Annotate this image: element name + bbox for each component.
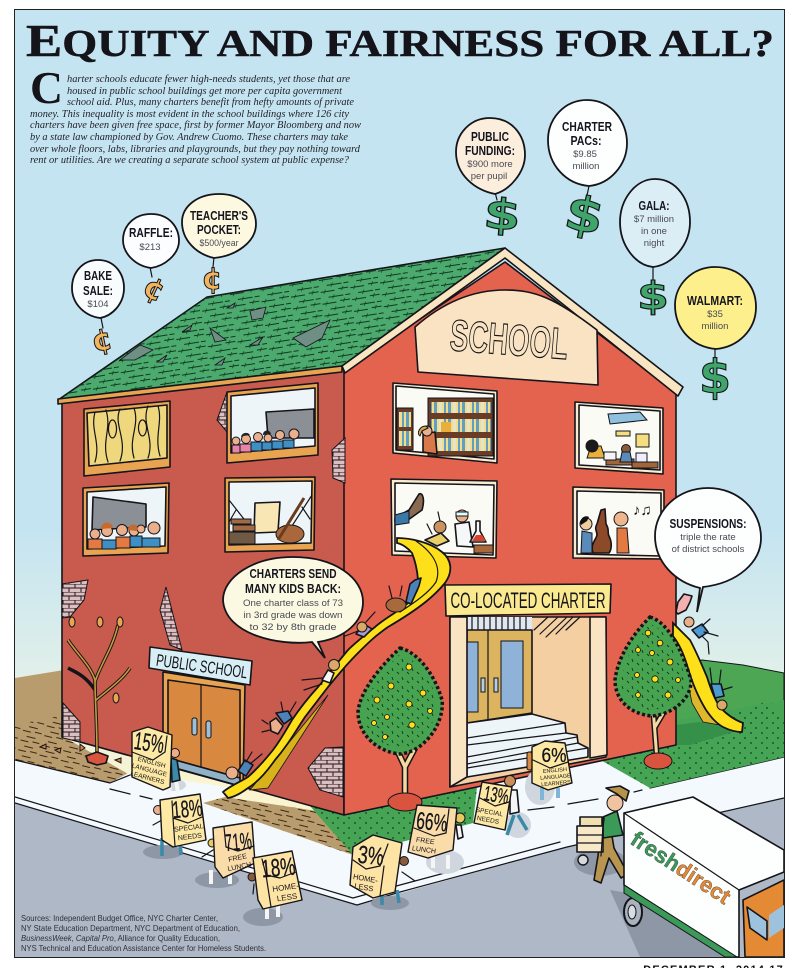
icon: dollar: $ (699, 350, 731, 404)
sidewalk dashes (110, 789, 642, 810)
card walker: 66% free lunch (408, 805, 465, 874)
window: science lab with slide opening (391, 479, 497, 558)
balloon: gala: in one (641, 226, 667, 237)
sources: NYS Technical and Education Assistance Center for Homeless Students. (21, 943, 266, 953)
double doors (467, 630, 532, 723)
balloon: charter PACs: $9.85 (573, 149, 597, 160)
music notes: ♪♫ (633, 502, 652, 519)
balloon: raffle (123, 214, 179, 310)
intro paragraph: money. This inequality is most evident in the school buildings where 126 city (30, 108, 349, 120)
speech bubble: charters send many kids back (223, 557, 363, 658)
sidewalk (15, 757, 784, 905)
green stripe (624, 885, 737, 957)
speech bubble: suspensions (655, 488, 761, 612)
curb line (15, 757, 784, 905)
intro paragraph: rent or utilities. Are we creating a separate school system at public expense? (30, 154, 349, 166)
speech bubble: charters send many kids back: One charter class of 73 (243, 598, 343, 609)
card walker: 15% English language learners (129, 727, 186, 795)
cab (743, 880, 784, 957)
card walker: 71% free lunch: FREE (228, 853, 248, 864)
steps (467, 714, 588, 777)
intro paragraph: harter schools educate fewer high-needs students, yet those that are (67, 73, 350, 85)
window: computer office (575, 402, 663, 474)
balloon: public funding (456, 118, 525, 241)
entrance ceiling hatching (467, 617, 580, 637)
card walker: 15% English language learners: ENGLISH (137, 756, 166, 770)
right tree (615, 617, 691, 769)
drop cap: C (30, 63, 63, 113)
entrance: co-located charter (445, 584, 611, 787)
window: upper classroom, crowded (227, 383, 318, 463)
public school sign: PUBLIC SCHOOL (155, 651, 249, 682)
icon: dollar: $ (637, 274, 669, 318)
front lawn and dirt patch (203, 787, 477, 855)
intro paragraph (30, 63, 362, 166)
card walker: 66% free lunch: FREE (415, 837, 435, 846)
brick patches (62, 392, 345, 797)
intro paragraph: housed in public school buildings get more per capita government (67, 85, 343, 97)
balloon: raffle: RAFFLE: (129, 226, 173, 240)
truck shadow (610, 890, 740, 957)
charter sign (445, 584, 611, 616)
speech bubble: suspensions: of district schools (672, 544, 745, 555)
card walker: 66% free lunch: LUNCH (412, 845, 436, 856)
balloon: walmart: million (702, 321, 728, 332)
card walker: 18% special needs: 18% (171, 795, 203, 824)
balloon: walmart: $35 (707, 309, 723, 320)
speech bubble: charters send many kids back: in 3rd grade was down (244, 610, 342, 621)
card walker: 71% free lunch: 71% (224, 828, 253, 857)
card walker: 3% homeless: HOME- (352, 872, 379, 885)
right yellow slide (673, 623, 743, 732)
intro paragraph: school aid. Plus, many charters benefit from hefty amounts of private (67, 96, 354, 108)
center tree (358, 648, 442, 811)
card walker: 18% homeless: 18% (260, 853, 296, 883)
balloon: gala: $7 million (634, 214, 674, 225)
entrance recess (450, 617, 606, 787)
title: EQUITY AND FAIRNESS FOR ALL? (26, 15, 774, 66)
card walker: 71% free lunch (195, 822, 255, 888)
speech bubble: suspensions: triple the rate (680, 532, 736, 543)
sources: BusinessWeek, Capital Pro, Alliance for Quality Education, (21, 933, 220, 943)
icon: cent: ¢ (202, 262, 222, 297)
school sign (415, 290, 598, 385)
card walker: 3% homeless: 3% (356, 841, 385, 871)
window: lower classroom, crowded (83, 483, 169, 556)
sources (21, 913, 266, 953)
window: storage room (225, 477, 315, 552)
speech bubble: charters send many kids back: MANY KIDS BACK: (245, 582, 341, 596)
balloon: public funding: $900 more (467, 159, 513, 170)
intro paragraph: charters have been given free space, first by former Mayor Bloomberg and now (30, 119, 362, 131)
icon: cent: ¢ (88, 321, 116, 360)
window: library (393, 383, 497, 463)
card walker: 18% special needs: SPECIAL (174, 823, 204, 834)
delivery truck (610, 797, 784, 957)
balloon: gala: GALA: (638, 198, 670, 213)
card walker: 3% homeless (350, 835, 415, 910)
window: boarded-up plywood (84, 401, 170, 476)
card walker: 15% English language learners: 15% (132, 727, 166, 759)
icon: cent: ¢ (137, 269, 171, 310)
public school door (163, 672, 245, 787)
balloon: gala (620, 179, 690, 318)
freshdirect logo: freshdirect (626, 826, 736, 909)
balloon: teacher's pocket: TEACHER'S (190, 208, 248, 223)
balloon: raffle: $213 (139, 242, 161, 253)
balloon: charter PACs: PACs: (570, 133, 602, 148)
balloon: public funding: per pupil (471, 171, 507, 182)
school sign lettering: SCHOOL (448, 311, 570, 369)
balloon: public funding: FUNDING: (465, 143, 515, 158)
balloon: teacher's pocket: $500/year (200, 238, 238, 249)
sources: Sources: Independent Budget Office, NYC Charter Center, (21, 913, 218, 923)
public school sign (149, 647, 252, 685)
card walker: 15% English language learners: LEARNERS (129, 770, 166, 786)
window: music room (573, 487, 664, 559)
card walker: 18% special needs: NEEDS (178, 832, 203, 842)
card walker: 15% English language learners: LANGUAGE (131, 762, 168, 779)
card walker: 13% special needs (474, 776, 531, 838)
intro paragraph: by a state law championed by Gov. Andrew Cuomo. These charters may take (30, 131, 348, 143)
balloon: bake sale (72, 260, 124, 360)
card walker: 66% free lunch: 66% (415, 807, 449, 838)
card walker: 6% English language learners: LANGUAGE (540, 773, 571, 782)
balloon: charter PACs (548, 100, 627, 247)
balloon: bake sale: BAKE (84, 269, 112, 283)
truck box (624, 797, 784, 957)
balloon: charter PACs: CHARTER (562, 119, 612, 134)
balloon: bake sale: SALE: (83, 284, 113, 298)
card walker: 18% special needs (143, 794, 206, 859)
gable trim (342, 248, 683, 396)
truck wheel (624, 898, 642, 926)
delivery worker with hand cart (574, 786, 629, 883)
card walker: 6% English language learners: ENGLISH (543, 767, 567, 775)
balloon: bake sale: $104 (87, 299, 109, 310)
card walker: 13% special needs: SPECIAL (475, 807, 504, 818)
icon: dollar: $ (482, 189, 523, 241)
intro paragraph: over whole floors, labs, libraries and playgrounds, but they pay nothing toward (30, 143, 360, 155)
speech bubble: charters send many kids back: CHARTERS SEND (250, 567, 336, 581)
right wall (344, 262, 676, 815)
right hill (642, 660, 784, 788)
left eave (58, 366, 342, 404)
bare tree (40, 617, 130, 765)
balloon: teacher's pocket: POCKET: (197, 222, 241, 237)
speech bubble: suspensions: SUSPENSIONS: (670, 517, 746, 531)
card walker: 6% English language learners (525, 741, 572, 805)
card walker: 18% homeless: LESS (276, 892, 298, 903)
entrance columns (450, 617, 467, 787)
children sliding down main slide (226, 578, 421, 779)
left wall (62, 368, 345, 815)
card walker: 13% special needs: NEEDS (476, 815, 500, 826)
road (15, 798, 784, 957)
balloon: gala: night (644, 238, 665, 249)
balloon: walmart (675, 267, 756, 404)
right lawn (597, 700, 784, 788)
children on right slide (676, 594, 732, 710)
card walker: 18% homeless (243, 851, 302, 926)
roof (58, 248, 505, 400)
card walker: 13% special needs: 13% (482, 782, 510, 809)
main yellow slide (223, 538, 450, 798)
sources: NY State Education Department, NYC Department of Education, (21, 923, 240, 933)
card walker: 6% English language learners: 6% (542, 745, 567, 767)
card walker: 6% English language learners: LEARNERS (541, 780, 571, 788)
card walker: 18% homeless: HOME- (272, 881, 300, 894)
card walker: 3% homeless: LESS (354, 881, 374, 893)
balloon: charter PACs: million (573, 161, 599, 172)
icon: dollar: $ (560, 184, 609, 247)
balloon: walmart: WALMART: (687, 293, 743, 308)
bare dirt ground, left (15, 670, 130, 783)
card walker: 71% free lunch: LUNCH (227, 861, 252, 873)
charter sign: CO-LOCATED CHARTER (450, 588, 606, 613)
building (58, 248, 683, 815)
balloon: teacher's pocket (182, 194, 256, 297)
speech bubble: charters send many kids back: to 32 by 8th grade (250, 622, 336, 633)
balloon: public funding: PUBLIC (471, 129, 509, 144)
